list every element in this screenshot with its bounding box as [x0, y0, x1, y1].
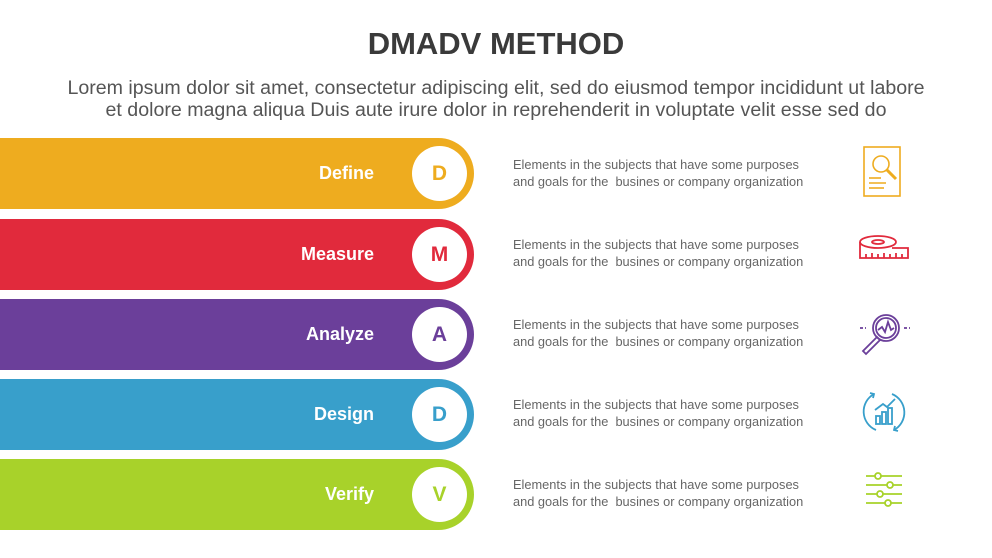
- text: analyze: and goals for the busines or company organization: [513, 334, 803, 349]
- bar: design: D: [432, 403, 447, 426]
- bar: measure: M: [431, 243, 448, 266]
- text: design: [513, 397, 803, 429]
- bar: measure: [0, 219, 474, 290]
- icon: growth cycle: [862, 392, 906, 432]
- text: define: [513, 157, 803, 189]
- icon: document search: [863, 146, 901, 197]
- bar: define: [0, 138, 474, 209]
- bar: verify: V: [432, 483, 446, 506]
- subtitle: Lorem ipsum dolor sit amet, consectetur adipiscing elit, sed do eiusmod tempor incididunt ut labore: [67, 77, 925, 99]
- bar: measure: Measure: [301, 244, 374, 264]
- text: define: and goals for the busines or company organization: [513, 174, 803, 189]
- text: design: Elements in the subjects that have some purposes: [513, 397, 799, 412]
- text: measure: [513, 237, 803, 269]
- text: measure: Elements in the subjects that have some purposes: [513, 237, 799, 252]
- subtitle: et dolore magna aliqua Duis aute irure dolor in reprehenderit in voluptate velit esse sed do: [106, 99, 886, 121]
- text: design: and goals for the busines or company organization: [513, 414, 803, 429]
- bar: analyze: A: [432, 323, 447, 346]
- text: measure: and goals for the busines or company organization: [513, 254, 803, 269]
- bar: design: Design: [314, 404, 374, 424]
- text: verify: Elements in the subjects that have some purposes: [513, 477, 799, 492]
- bar: design: [0, 379, 474, 450]
- icon: magnifier analysis: [860, 314, 910, 356]
- text: define: Elements in the subjects that have some purposes: [513, 157, 799, 172]
- text: analyze: Elements in the subjects that have some purposes: [513, 317, 799, 332]
- bar: analyze: Analyze: [306, 324, 374, 344]
- text: analyze: [513, 317, 803, 349]
- bar: analyze: [0, 299, 474, 370]
- icon: tape measure: [859, 235, 909, 259]
- bar: verify: [0, 459, 474, 530]
- text: verify: [513, 477, 803, 509]
- icon: sliders: [866, 472, 902, 507]
- bar: define: Define: [319, 163, 374, 183]
- title: DMADV METHOD: [368, 26, 624, 61]
- text: verify: and goals for the busines or company organization: [513, 494, 803, 509]
- bar: define: D: [432, 162, 447, 185]
- bar: verify: Verify: [325, 484, 374, 504]
- subtitle: [67, 77, 925, 121]
